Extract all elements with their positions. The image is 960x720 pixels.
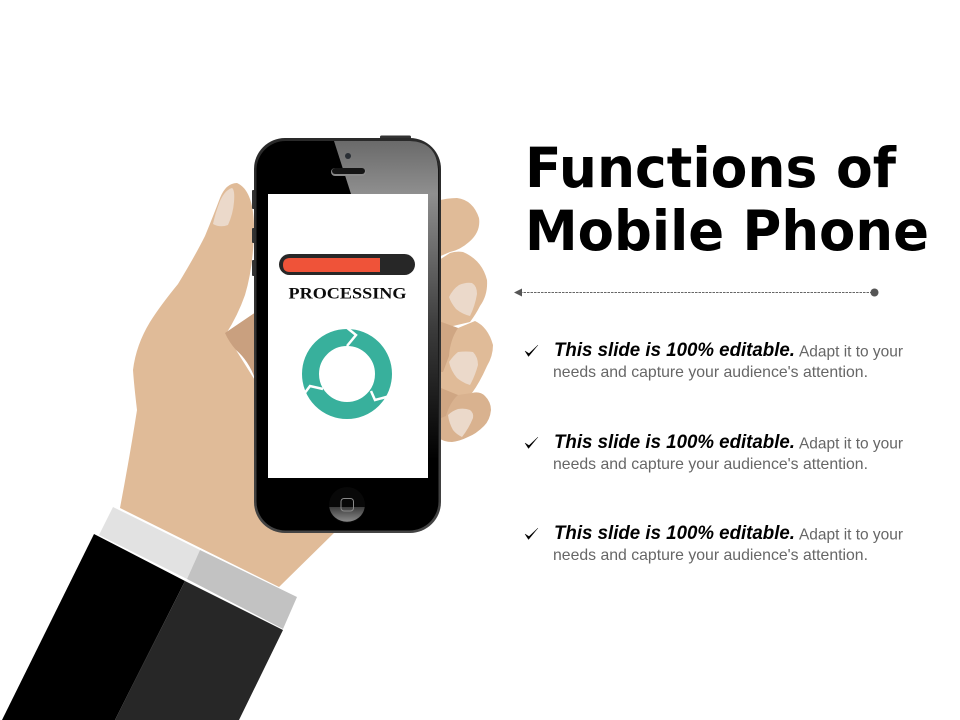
- check icon: [525, 437, 538, 448]
- finger 4: [436, 386, 491, 442]
- glass gloss: [334, 141, 438, 194]
- side buttons: [252, 136, 411, 276]
- title: Mobile Phone: [525, 199, 929, 263]
- finger 3: [436, 320, 493, 395]
- palm shadow: [225, 312, 256, 382]
- jacket black: [2, 534, 185, 720]
- screen: [268, 194, 428, 478]
- bullet 2: This slide is 100% editable.: [554, 432, 795, 453]
- check icon: [525, 345, 538, 356]
- processing label: PROCESSING: [288, 286, 407, 302]
- phone body: [254, 138, 441, 533]
- dotted divider arrow: [514, 288, 878, 296]
- check icon: [525, 528, 538, 540]
- bullet 1: needs and capture your audience's attention.: [553, 364, 868, 381]
- sleeve: [2, 507, 297, 720]
- shirt cuff light: [99, 507, 200, 579]
- bullet 2: Adapt it to your: [799, 436, 904, 452]
- jacket dark: [115, 581, 283, 720]
- bullet 3: This slide is 100% editable.: [554, 523, 795, 544]
- bullet 3: needs and capture your audience's attention.: [553, 547, 868, 564]
- bullet 3: Adapt it to your: [799, 526, 904, 544]
- bullet 3: [525, 523, 904, 564]
- shirt cuff shade: [187, 550, 297, 629]
- bullet 1: Adapt it to your: [799, 344, 904, 360]
- circular arrows icon: [304, 327, 390, 410]
- home button: [329, 487, 365, 523]
- phone: [252, 136, 441, 533]
- thumb nail: [213, 188, 234, 226]
- title: [525, 136, 929, 263]
- bullet 2: needs and capture your audience's attention.: [553, 456, 868, 473]
- palm and thumb: [120, 183, 336, 587]
- finger 2: [436, 252, 487, 330]
- title: Functions of: [525, 136, 897, 200]
- finger 1: [436, 198, 479, 258]
- bullet 1: This slide is 100% editable.: [554, 340, 795, 361]
- camera: [345, 153, 351, 159]
- speaker: [331, 168, 366, 176]
- bullet 2: [525, 432, 904, 473]
- progress bar: [279, 254, 415, 275]
- hand: [120, 183, 493, 587]
- bullet 1: [525, 340, 904, 381]
